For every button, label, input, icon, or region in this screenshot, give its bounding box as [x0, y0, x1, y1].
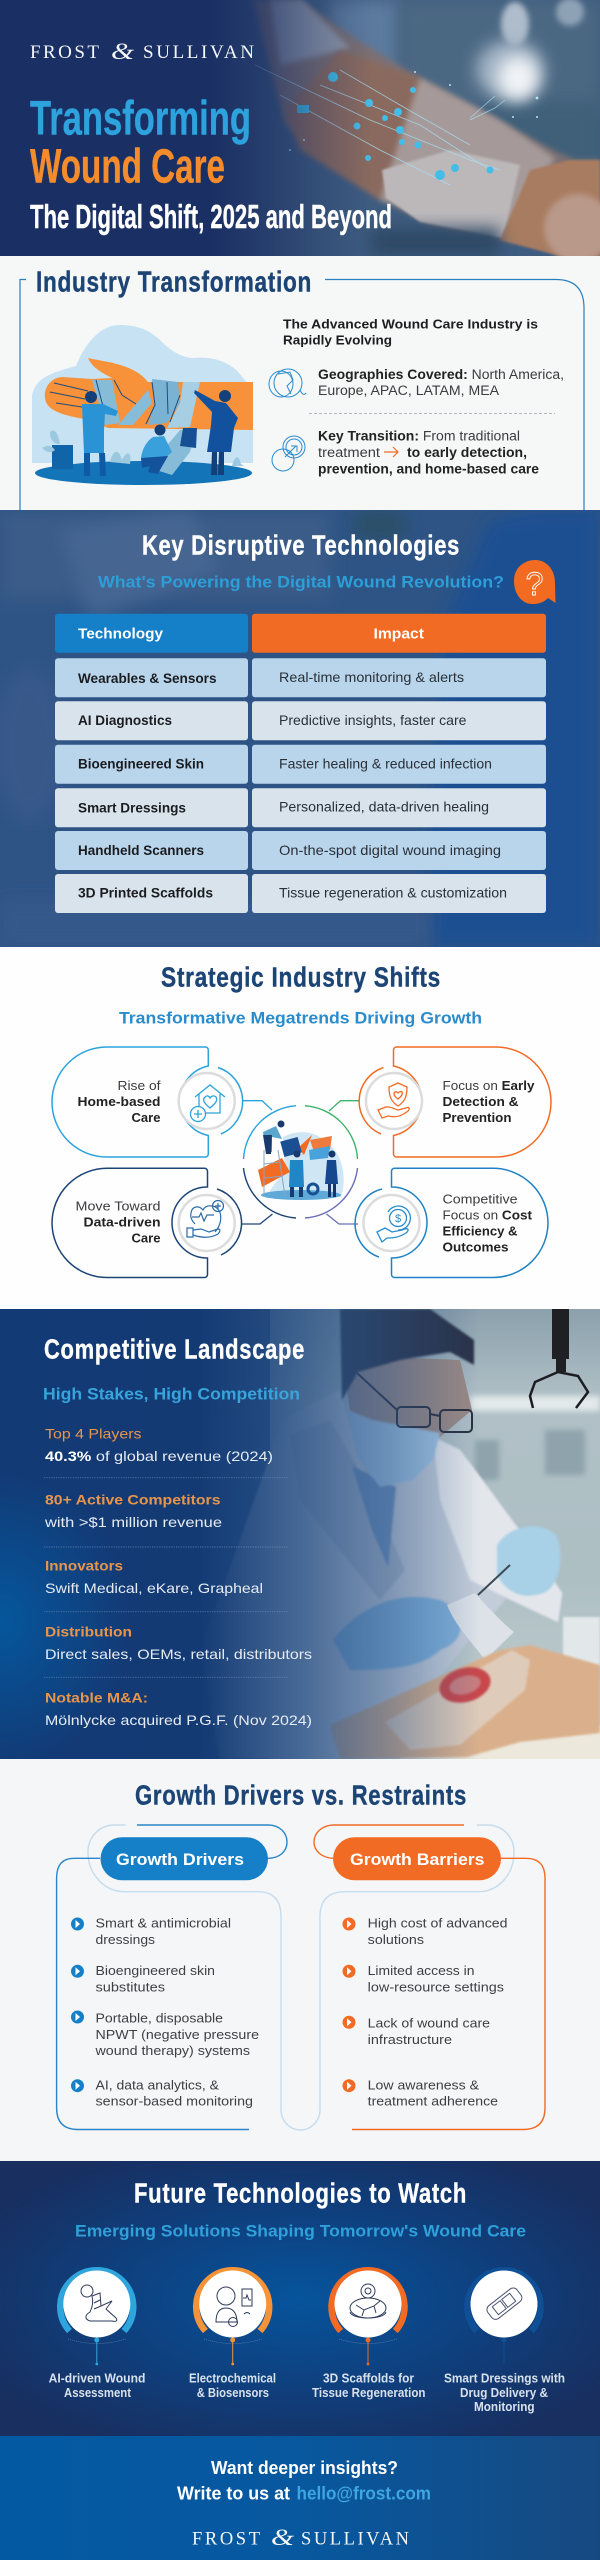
- logo: Frost & Sullivan: [192, 2525, 409, 2550]
- dashed divider: [309, 412, 555, 414]
- text: data-driven care: Data-driven: [84, 1215, 161, 1230]
- text: cost efficiency: Efficiency &: [442, 1223, 518, 1238]
- text: advanced wound care: The Advanced Wound Care Industry is: [283, 316, 538, 331]
- label: Monitoring: [474, 2400, 535, 2414]
- item: infrastructure: Lack of wound care: [368, 2016, 490, 2031]
- item: skin substitutes: Bioengineered skin: [96, 1963, 215, 1978]
- row: bioengineered skin: [55, 745, 546, 784]
- title: The Digital Shift, 2025 and Beyond: [30, 198, 392, 235]
- heading: Growth Drivers vs. Restraints: [135, 1779, 467, 1810]
- stat: distribution: Distribution: [45, 1624, 132, 1640]
- text: early detection: Prevention: [442, 1110, 512, 1125]
- icon: heart in hand: [187, 1200, 224, 1237]
- item: dressings: [71, 1916, 231, 1947]
- item: NPWT: [71, 2010, 259, 2058]
- table: [55, 614, 546, 913]
- panel: footer call to action: [0, 2436, 600, 2560]
- row: wearables: Real-time monitoring & alerts: [279, 669, 464, 685]
- row: handheld scanners: On-the-spot digital wound imaging: [279, 842, 501, 858]
- figure: left caregiver: [82, 391, 118, 476]
- text: cost efficiency: Competitive: [442, 1191, 518, 1206]
- icon: foot with scan: [81, 2285, 117, 2321]
- text: contact: [177, 2483, 431, 2503]
- table header: [55, 614, 546, 653]
- icon: hand with coin: $: [395, 1213, 401, 1225]
- item: limited access: [342, 1963, 505, 1994]
- row: AI diagnostics: AI Diagnostics: [78, 712, 172, 728]
- row: wearables: [55, 658, 546, 697]
- stat: active competitors: [44, 1491, 222, 1530]
- item: limited access: Limited access in: [368, 1963, 474, 1978]
- item: electrochemical biosensors: [189, 2270, 276, 2400]
- circuit traces: [255, 65, 505, 185]
- item: AI and sensors: [71, 2078, 253, 2109]
- label: Smart Dressings with: [444, 2372, 565, 2386]
- item: high cost: High cost of advanced: [368, 1916, 508, 1931]
- stat: active competitors: with >$1 million revenue: [44, 1514, 222, 1530]
- label: Assessment: [64, 2386, 132, 2400]
- text: cost efficiency: [442, 1191, 533, 1254]
- text: geographies: Europe, APAC, LATAM, MEA: [318, 383, 499, 398]
- heading: Key Disruptive Technologies: [142, 529, 460, 560]
- card: cost efficiency: [355, 1168, 548, 1278]
- label: [444, 2372, 565, 2414]
- text: key transition: [318, 429, 540, 476]
- label: [189, 2372, 276, 2400]
- title: Transforming: [30, 92, 251, 146]
- text: geographies: Geographies Covered: North America,: [318, 367, 564, 382]
- text: early detection: Detection &: [442, 1094, 518, 1109]
- heading: Strategic Industry Shifts: [161, 962, 441, 993]
- text: early detection: [442, 1078, 535, 1125]
- logo: Frost & Sullivan: &: [111, 39, 134, 64]
- column: growth drivers: [57, 1825, 287, 2130]
- card: early detection: [359, 1047, 551, 1157]
- icon: question bubble: [514, 560, 556, 604]
- label: [49, 2372, 145, 2400]
- item: infrastructure: [342, 2016, 490, 2047]
- stat: notable M&A: Mölnlycke acquired P.G.F. (Nov 2024): [45, 1712, 312, 1728]
- logo: Frost & Sullivan: SULLIVAN: [143, 42, 254, 63]
- row: handheld scanners: Handheld Scanners: [78, 842, 204, 858]
- label: & Biosensors: [197, 2386, 269, 2400]
- stat: top 4 players: 40.3% of global revenue (2024): [45, 1448, 273, 1464]
- pill: growth barriers: Growth Barriers: [350, 1850, 484, 1869]
- item: skin substitutes: [71, 1963, 215, 1994]
- item: skin substitutes: substitutes: [96, 1979, 166, 1994]
- item: NPWT: wound therapy) systems: [94, 2043, 251, 2058]
- panel: header hero: [0, 0, 600, 262]
- icon: globe: [269, 369, 306, 397]
- logo: Frost & Sullivan: FROST: [192, 2530, 260, 2550]
- stat: top 4 players: [45, 1425, 273, 1464]
- panel: key disruptive technologies: [0, 509, 600, 947]
- title: Wound Care: [30, 140, 225, 194]
- stat: innovators: Innovators: [45, 1558, 123, 1574]
- item: dressings: dressings: [96, 1932, 156, 1947]
- row: AI diagnostics: [55, 701, 546, 740]
- label: Drug Delivery &: [460, 2386, 548, 2400]
- text: home-based care: Care: [132, 1110, 160, 1125]
- stat: active competitors: 80+ Active Competitors: [45, 1491, 221, 1507]
- icon: person with device: [216, 2287, 252, 2326]
- label: Electrochemical: [189, 2372, 276, 2386]
- icon: smart bandage: [485, 2286, 524, 2321]
- item: smart dressings: [444, 2270, 565, 2414]
- text: home-based care: Rise of: [118, 1078, 161, 1093]
- connecting outline: [88, 1825, 514, 2130]
- icon: transition circles: [272, 436, 305, 471]
- subheading: High Stakes, High Competition: [43, 1384, 300, 1403]
- text: data-driven care: Move Toward: [76, 1199, 160, 1214]
- photo: nurse background: [0, 509, 600, 947]
- item: NPWT: NPWT (negative pressure: [96, 2027, 259, 2042]
- logo: Frost & Sullivan: SULLIVAN: [301, 2530, 409, 2550]
- stat: notable M&A: Notable M&A:: [45, 1690, 148, 1706]
- text: cost efficiency: Focus on Cost: [442, 1207, 533, 1222]
- table header: Impact: [374, 625, 424, 642]
- row: bioengineered skin: Faster healing & reduced infection: [279, 756, 492, 772]
- item: awareness: treatment adherence: [368, 2094, 498, 2109]
- logo: Frost & Sullivan: FROST: [30, 42, 99, 63]
- row: handheld scanners: [55, 831, 546, 870]
- icon: house with heart: [190, 1085, 225, 1122]
- row: 3D printed scaffolds: [55, 874, 546, 913]
- text: key transition: treatment: [318, 445, 380, 460]
- subheading: Transformative Megatrends Driving Growth: [119, 1008, 482, 1027]
- illustration: team with bandaged hand: [258, 1120, 344, 1200]
- heading: Future Technologies to Watch: [134, 2177, 467, 2208]
- card: home-based care: [52, 1047, 243, 1157]
- row: bioengineered skin: Bioengineered Skin: [78, 756, 204, 772]
- item: 3D scaffolds: [312, 2270, 426, 2400]
- text: home-based care: [78, 1078, 161, 1125]
- text: geographies: [318, 367, 564, 398]
- icon: scaffold dish: [350, 2284, 386, 2318]
- row: smart dressings: Smart Dressings: [78, 800, 186, 816]
- stat: innovators: [45, 1558, 263, 1596]
- logo: Frost & Sullivan: &: [271, 2525, 294, 2550]
- logo: Frost & Sullivan: [30, 39, 254, 64]
- text: key transition: Key Transition: From traditional: [318, 429, 520, 444]
- panel: strategic industry shifts: [0, 947, 600, 1310]
- text: contact: hello@frost.com: [296, 2483, 431, 2503]
- item: high cost: solutions: [368, 1932, 425, 1947]
- figure: crouching caregiver: [141, 424, 172, 474]
- row: AI diagnostics: Predictive insights, faster care: [279, 712, 467, 728]
- label: [312, 2372, 426, 2400]
- row: smart dressings: Personalized, data-driven healing: [279, 799, 489, 815]
- text: key transition: to early detection,: [407, 445, 527, 460]
- row: 3D printed scaffolds: Tissue regeneration & customization: [279, 885, 507, 901]
- row: wearables: Wearables & Sensors: [78, 670, 217, 686]
- pill: growth drivers: Growth Drivers: [116, 1850, 244, 1869]
- heading: Industry Transformation: [36, 267, 312, 299]
- stat: distribution: Direct sales, OEMs, retail, distributors: [45, 1646, 312, 1662]
- row: smart dressings: [55, 788, 546, 827]
- table header: Technology: [78, 625, 164, 642]
- text: contact: Write to us at: [177, 2483, 290, 2503]
- item: awareness: [342, 2078, 498, 2109]
- item: limited access: low-resource settings: [368, 1979, 505, 1994]
- stat: innovators: Swift Medical, eKare, Grapheal: [45, 1580, 263, 1596]
- card: data-driven care: [52, 1168, 242, 1278]
- title: [30, 92, 392, 235]
- item: AI and sensors: AI, data analytics, &: [96, 2078, 219, 2093]
- text: data-driven care: [76, 1199, 161, 1246]
- item: NPWT: Portable, disposable: [96, 2011, 223, 2026]
- panel: future technologies: [0, 2161, 600, 2436]
- item: AI and sensors: sensor-based monitoring: [96, 2094, 253, 2109]
- subheading: What's Powering the Digital Wound Revolution?: [98, 573, 504, 592]
- text: advanced wound care: Rapidly Evolving: [283, 332, 392, 347]
- text: data-driven care: Care: [132, 1231, 160, 1246]
- text: early detection: Focus on Early: [442, 1078, 535, 1093]
- text: cost efficiency: Outcomes: [442, 1239, 508, 1254]
- item: dressings: Smart & antimicrobial: [96, 1916, 231, 1931]
- icon: question bubble: ?: [526, 566, 543, 602]
- item: high cost: [342, 1916, 508, 1947]
- label: 3D Scaffolds for: [323, 2372, 414, 2386]
- row: 3D printed scaffolds: 3D Printed Scaffolds: [78, 885, 213, 901]
- text: want deeper insights: Want deeper insights?: [211, 2458, 398, 2478]
- stat: notable M&A: [45, 1690, 312, 1728]
- item: infrastructure: infrastructure: [368, 2032, 452, 2047]
- panel: growth drivers vs restraints: [0, 1759, 600, 2161]
- figure: standing caregiver: [194, 390, 238, 475]
- item: AI wound assessment: [49, 2270, 145, 2400]
- stat: top 4 players: Top 4 Players: [45, 1425, 142, 1441]
- column: growth barriers: [314, 1825, 545, 2130]
- pill: growth barriers: [333, 1837, 501, 1880]
- stat: distribution: [45, 1624, 312, 1662]
- text: key transition: prevention, and home-based care: [318, 461, 540, 476]
- label: AI-driven Wound: [49, 2372, 145, 2386]
- panel: industry transformation: [0, 256, 600, 510]
- icon: hand with coin: [377, 1206, 410, 1242]
- photo: clinician applying digital dressing: [200, 1309, 600, 1759]
- subheading: Emerging Solutions Shaping Tomorrow's Wound Care: [75, 2222, 526, 2241]
- heading: Competitive Landscape: [44, 1333, 305, 1364]
- central ring: [244, 1106, 358, 1218]
- panel: competitive landscape: [0, 1309, 600, 1770]
- connectors: [242, 1101, 360, 1224]
- icon: hand with shield: [378, 1083, 409, 1118]
- text: advanced wound care: [283, 316, 538, 347]
- pill: growth drivers: [100, 1837, 268, 1880]
- text: home-based care: Home-based: [78, 1094, 161, 1109]
- illustration: bandaged arm and caregivers: [32, 325, 253, 485]
- label: Tissue Regeneration: [312, 2386, 426, 2400]
- item: awareness: Low awareness &: [368, 2078, 479, 2093]
- photo: bandaged arm with circuits: [241, 0, 600, 256]
